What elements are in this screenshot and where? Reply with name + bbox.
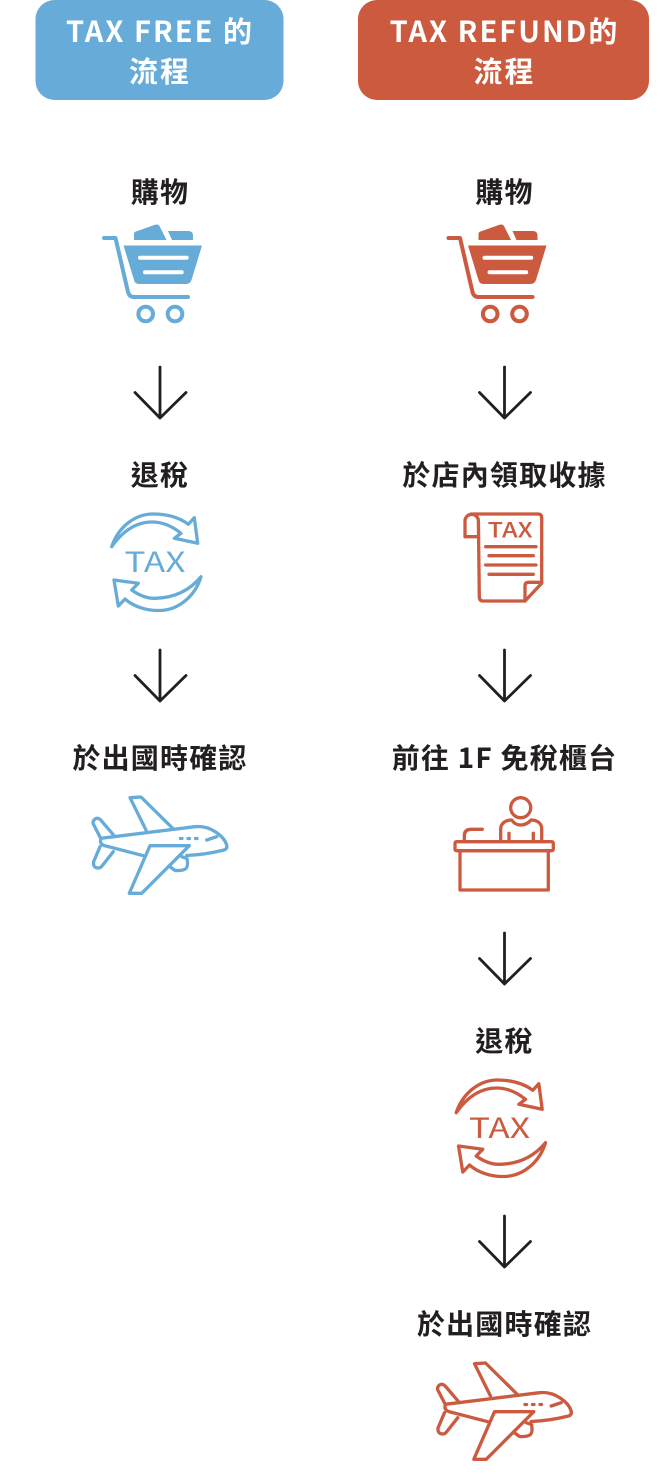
step label: tax refund: 退稅 [131, 454, 189, 494]
icon: airplane [438, 1363, 571, 1459]
icon: airplane [93, 797, 227, 893]
icon: shopping cart [448, 224, 546, 321]
heading: tax refund: 流程 [473, 49, 536, 91]
arrow: down [480, 650, 530, 701]
step label: collect receipt in store: 於店內領取收據 [402, 454, 607, 494]
icon: tax refund cycle: TAX [469, 1107, 530, 1147]
panel: tax free flow [36, 0, 284, 893]
step label: go to 1F tax counter: 前往 1F 免稅櫃台 [392, 737, 617, 777]
arrow: down [135, 367, 186, 418]
step label: tax refund: 退稅 [475, 1020, 534, 1060]
step label: airport confirmation: 於出國時確認 [72, 737, 248, 777]
icon: tax receipt: TAX [488, 514, 533, 544]
arrow: down [480, 1216, 530, 1267]
icon: tax refund cycle [112, 514, 201, 611]
heading: tax free: TAX FREE 的 [66, 9, 254, 51]
icon: tax refund cycle: TAX [124, 541, 186, 581]
heading: tax refund [358, 0, 649, 100]
step label: airport confirmation: 於出國時確認 [417, 1303, 592, 1343]
step label: shopping: 購物 [475, 171, 534, 211]
arrow: down [480, 367, 530, 418]
heading: tax free [36, 0, 284, 100]
panel: tax refund flow [358, 0, 649, 1459]
heading: tax free: 流程 [129, 49, 191, 91]
arrow: down [480, 933, 530, 984]
icon: tax receipt [465, 514, 542, 601]
step label: shopping: 購物 [131, 171, 189, 211]
icon: tax refund cycle [456, 1080, 546, 1177]
icon: service counter [455, 798, 553, 890]
icon: shopping cart [104, 224, 202, 321]
arrow: down [135, 650, 186, 701]
heading: tax refund: TAX REFUND的 [390, 9, 619, 51]
